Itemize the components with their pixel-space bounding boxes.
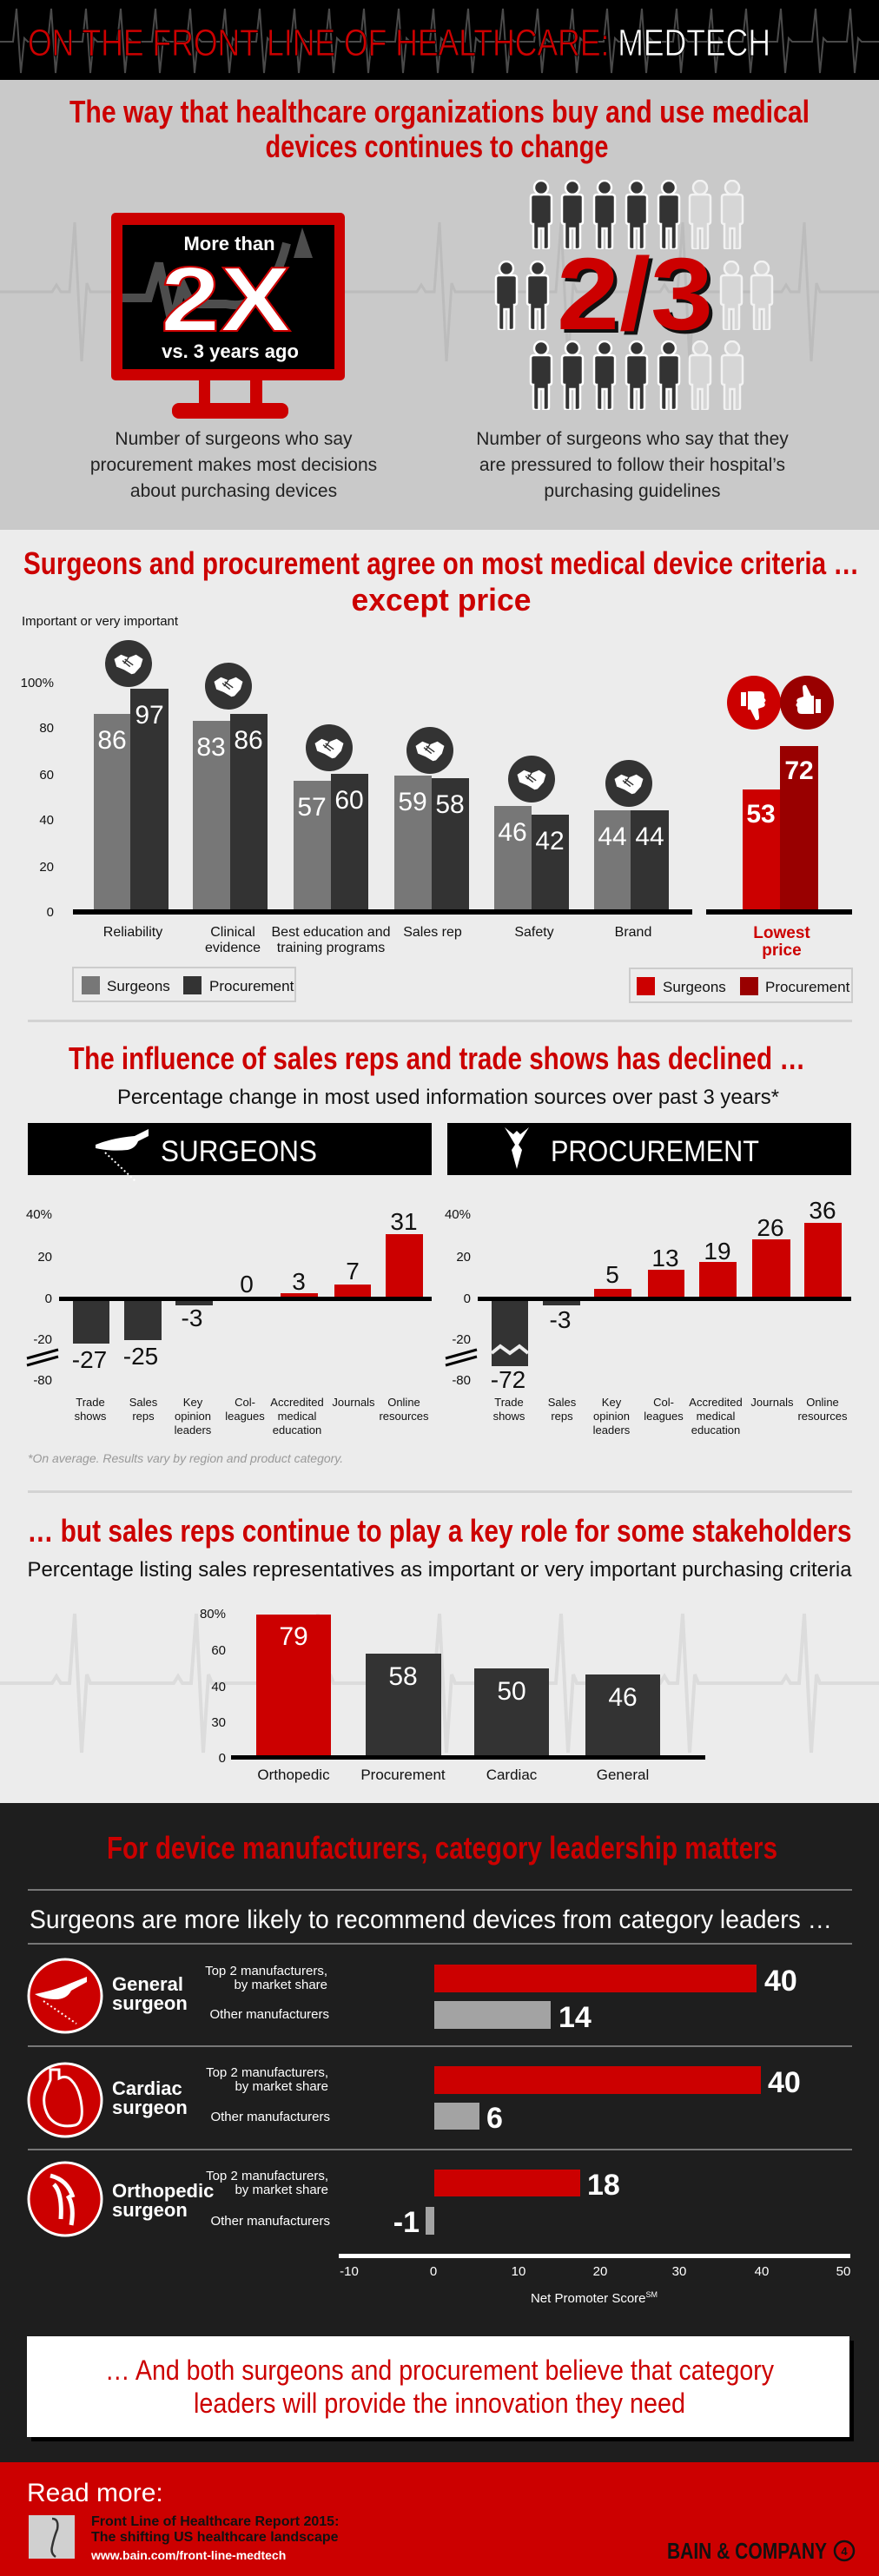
legend: red: Procurement [765,979,850,995]
chart: surgeons change: 0 [45,1291,52,1306]
panel: category leadership [0,1803,879,2462]
chart: sales reps: 80% [200,1607,226,1622]
chart: procurement change: medical [697,1410,736,1423]
caption: procurement decisions: Number of surgeons who say [115,429,353,449]
x labels: Brand [615,925,651,940]
chart: sales reps: General [597,1767,649,1783]
chart: procurement change: 19 [704,1238,731,1265]
chart: sales reps: 40 [211,1680,226,1694]
y axis: 0 [47,905,54,920]
chart: surgeons change: Sales [129,1396,158,1409]
row: general surgeon [29,1959,797,2034]
chart: sales reps: 60 [211,1643,226,1658]
bars: criteria: 57 [297,793,327,822]
chart: surgeons change: Col- [235,1396,255,1409]
row: orthopedic surgeon: 18 [587,2169,620,2202]
chart: sales reps: Orthopedic [257,1767,330,1783]
bars: lowest price: 53 [746,800,776,829]
chart: procurement change: 20 [456,1250,471,1265]
chart: surgeons change: 40% [26,1207,52,1222]
chart: procurement change: leaders [593,1423,631,1437]
banner: procurement: PROCUREMENT [551,1135,759,1168]
row: cardiac surgeon: 6 [486,2102,503,2135]
chart: surgeons change: Trade [76,1396,105,1409]
row: cardiac surgeon: Other manufacturers [210,2110,330,2124]
chart: surgeons change: -3 [182,1305,202,1331]
x labels: Best education and [271,925,391,940]
banner: surgeons [28,1123,432,1182]
chart: surgeons change: Journals [332,1396,375,1409]
axis: net promoter score: Net Promoter Score [531,2291,646,2306]
banner: surgeons: SURGEONS [161,1135,317,1168]
footer: read more: Front Line of Healthcare Report 2015: [91,2514,339,2529]
chart: procurement change: resources [797,1410,848,1423]
chart: surgeons change: opinion [175,1410,211,1423]
bars: criteria: 44 [598,822,627,851]
icon: people 2/3: 2/3 [557,237,713,352]
row: cardiac surgeon: by market share [235,2079,328,2094]
icon: report thumbnail [29,2515,75,2559]
label: lowest price: price [762,941,802,960]
subtitle: Surgeons are more likely to recommend devices from category leaders … [30,1906,832,1934]
chart: surgeons change: 0 [240,1271,254,1298]
chart: surgeons change: Accredited [270,1396,324,1409]
y axis: 40 [39,813,54,828]
chart: procurement change: 26 [757,1214,784,1241]
x labels: evidence [205,941,261,955]
icon: monitor 2X: 2X [161,248,291,351]
chart: procurement change: -80 [452,1373,471,1388]
chart: surgeons change [26,1207,432,1437]
chart: procurement change: -72 [491,1366,525,1393]
axis: net promoter score: SM [646,2290,658,2299]
chart: sales reps: Procurement [360,1767,446,1783]
row: orthopedic surgeon: Top 2 manufacturers, [206,2169,328,2183]
heading [23,545,859,618]
chart: procurement change: 0 [464,1291,471,1306]
heading: except price [351,582,532,618]
callout: innovation [27,2336,854,2441]
caption: procurement decisions: about purchasing devices [130,481,337,501]
row: general surgeon: by market share [234,1978,327,1992]
axis: net promoter score: 50 [836,2264,850,2279]
chart: procurement change: education [691,1423,740,1437]
legend: gray: Surgeons [107,978,170,994]
label: lowest price: Lowest [753,924,810,942]
axis: net promoter score: 0 [430,2264,437,2279]
chart: procurement change: Col- [653,1396,674,1409]
row: orthopedic surgeon: -1 [393,2206,420,2239]
logo: bain: 4 [841,2545,848,2558]
row: general surgeon: 14 [558,2001,592,2034]
chart: surgeons change: reps [132,1410,155,1423]
x labels [103,925,651,955]
bars: criteria: 46 [498,818,527,847]
bars: criteria [73,689,692,915]
icon: people 2/3 [496,181,772,410]
bars: criteria: 86 [234,726,263,755]
row: general surgeon: General [112,1973,183,1995]
chart: procurement change [445,1197,851,1437]
panel: criteria chart: Important or very important [22,614,179,629]
chart: sales reps: 50 [497,1677,526,1706]
caption: procurement decisions [90,429,377,501]
chart: surgeons change: -27 [72,1346,107,1373]
axis: net promoter score: 30 [672,2264,686,2279]
bars: criteria: 86 [97,726,127,755]
footer: read more [0,2462,879,2576]
row: cardiac surgeon [29,2064,801,2137]
logo: bain: BAIN & COMPANY [667,2538,827,2564]
chart: surgeons change: Key [183,1396,203,1409]
icon: monitor 2X [111,213,345,419]
chart: surgeons change: leagues [225,1410,265,1423]
chart: surgeons change: resources [379,1410,429,1423]
icon: monitor 2X: vs. 3 years ago [162,340,299,362]
y axis: 100% [21,676,54,690]
chart: surgeons change: 31 [390,1208,418,1235]
chart: procurement change: opinion [593,1410,630,1423]
chart: sales reps: 79 [279,1622,308,1651]
caption: pressured [476,429,789,501]
chart: surgeons change: 7 [346,1258,360,1285]
icon: people 2/3: 2/3 [560,241,717,355]
chart: surgeons change: 3 [292,1268,306,1295]
chart: procurement change: Accredited [689,1396,743,1409]
axis: net promoter score: 10 [512,2264,525,2279]
chart: surgeons change: leaders [175,1423,212,1437]
row: cardiac surgeon: Cardiac [112,2077,182,2099]
chart: sales reps: 30 [211,1715,226,1730]
chart: surgeons change: -80 [33,1373,52,1388]
row: cardiac surgeon: surgeon [112,2097,188,2118]
chart: surgeons change: shows [75,1410,107,1423]
chart: procurement change: 13 [651,1245,679,1271]
chart: surgeons change: -20 [33,1332,52,1347]
caption: pressured: Number of surgeons who say that they [476,429,789,449]
chart: procurement change: 40% [445,1207,471,1222]
caption: procurement decisions: procurement makes most decisions [90,455,377,475]
panel: buying change [0,80,879,530]
caption: pressured: are pressured to follow their hospital’s [479,455,785,475]
callout: innovation: leaders will provide the innovation they need [194,2388,685,2419]
row: cardiac surgeon: Top 2 manufacturers, [206,2065,328,2080]
legend: gray: Procurement [209,978,294,994]
chart: surgeons change: Online [387,1396,420,1409]
chart: procurement change: reps [551,1410,573,1423]
callout: innovation: … And both surgeons and procurement believe that category [105,2355,774,2386]
chart: sales reps: 0 [219,1751,226,1766]
row: orthopedic surgeon: by market share [235,2183,328,2197]
y axis: 80 [39,721,54,736]
y axis: 20 [39,860,54,875]
chart: procurement change: 5 [605,1261,619,1288]
y axis [21,676,54,920]
footnote: *On average. Results vary by region and product category. [28,1451,343,1465]
banner: procurement [447,1123,851,1175]
row: general surgeon: surgeon [112,1992,188,2014]
chart: procurement change: Key [602,1396,622,1409]
row: general surgeon: 40 [764,1965,797,1998]
bars: criteria: 60 [334,786,364,815]
caption: pressured: purchasing guidelines [544,481,721,501]
bars: criteria: 42 [535,827,565,855]
legend: red [630,968,852,1002]
chart: procurement change: Trade [494,1396,524,1409]
icons: handshakes [105,640,652,807]
axis: net promoter score: 20 [593,2264,607,2279]
x labels: Reliability [103,925,162,940]
x labels: Sales rep [403,925,462,940]
bars: lowest price [706,746,852,915]
row: orthopedic surgeon [29,2163,620,2239]
y axis: 60 [39,768,54,783]
row: orthopedic surgeon: surgeon [112,2199,188,2221]
row: orthopedic surgeon: Orthopedic [112,2180,214,2202]
chart: procurement change: -20 [452,1332,471,1347]
chart: sales reps: Cardiac [486,1767,538,1783]
footer: read more: Read more: [27,2479,163,2507]
axis: net promoter score: 40 [755,2264,769,2279]
bars: criteria: 58 [435,790,465,819]
x labels: Clinical [210,925,255,940]
chart: surgeons change: -25 [123,1343,158,1370]
chart: sales reps: 46 [608,1683,638,1712]
title: ON THE FRONT LINE OF HEALTHCARE: MEDTECH [28,22,770,64]
legend: red: Surgeons [663,979,726,995]
chart: procurement change: -3 [550,1306,571,1333]
footer: read more: www.bain.com/front-line-medtech [90,2548,286,2562]
row: cardiac surgeon: 40 [768,2066,801,2099]
chart: procurement change: shows [493,1410,525,1423]
x labels: Safety [514,925,554,940]
row: general surgeon: Other manufacturers [209,2007,329,2022]
x labels: training programs [277,941,385,955]
row: general surgeon: Top 2 manufacturers, [205,1964,327,1978]
axis: net promoter score [339,2254,850,2306]
subtitle: Percentage listing sales representatives as important or very important purchasing criteria [28,1558,852,1582]
heading [69,94,810,164]
chart: procurement change: Sales [548,1396,577,1409]
bars: criteria: 59 [398,788,427,816]
bars: criteria: 97 [135,701,164,730]
chart: procurement change: 36 [809,1197,836,1224]
chart: surgeons change: medical [278,1410,317,1423]
legend: gray [73,968,295,1001]
icons: thumbs [727,676,834,730]
chart: sales reps [0,1607,879,1783]
axis: net promoter score: -10 [340,2264,359,2279]
chart: surgeons change: 20 [37,1250,52,1265]
header band [0,0,879,80]
heading: devices continues to change [266,129,608,164]
label: lowest price [753,924,810,960]
panel: criteria chart [0,530,879,1803]
chart: procurement change: leagues [644,1410,684,1423]
bars: criteria: 83 [196,733,226,762]
subtitle: Percentage change in most used information sources over past 3 years* [117,1086,779,1109]
footer: read more: The shifting US healthcare landscape [91,2530,339,2545]
chart: surgeons change: education [273,1423,321,1437]
bars: criteria: 44 [635,822,664,851]
chart: sales reps: 58 [388,1662,418,1691]
row: orthopedic surgeon: Other manufacturers [210,2214,330,2229]
icon: monitor 2X: More than [183,233,275,254]
bars: lowest price: 72 [784,756,814,785]
chart: procurement change: Journals [750,1396,794,1409]
chart: procurement change: Online [806,1396,839,1409]
